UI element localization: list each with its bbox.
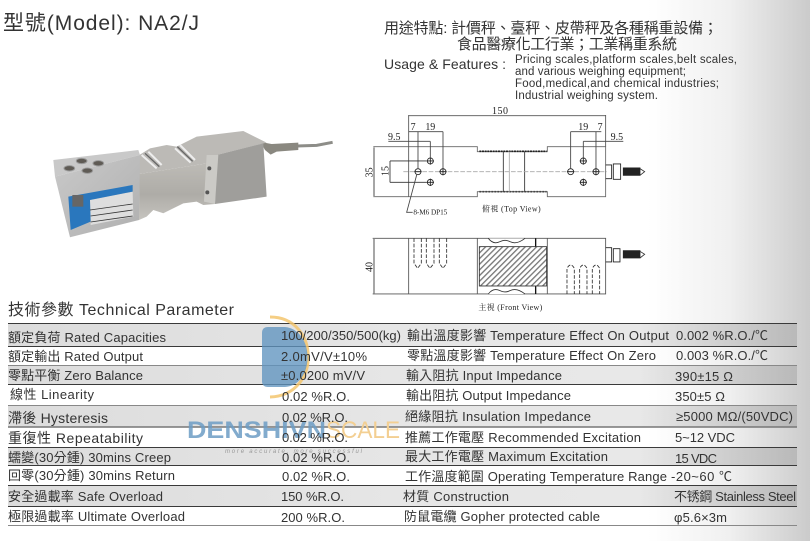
drawing dimensions: 19 <box>578 122 588 133</box>
right column labels: 材質 Construction <box>403 489 509 504</box>
left column labels <box>8 330 185 524</box>
right column values: 0.003 %R.O./℃ <box>676 348 768 363</box>
row shading <box>8 323 797 506</box>
right column values: 390±15 Ω <box>675 369 733 384</box>
table lines <box>8 324 797 526</box>
right column labels: 輸出溫度影響 Temperature Effect On Output <box>407 328 669 343</box>
usage text in English <box>515 54 737 102</box>
product photo: load cell <box>53 131 333 237</box>
drawing dimensions: 9.5 <box>611 132 623 143</box>
left column values: 0.02 %R.O. <box>282 389 350 404</box>
drawing dimensions: 40 <box>364 262 375 272</box>
right column labels: 工作溫度範圍 Operating Temperature Range <box>405 469 667 484</box>
right column values: 15 VDC <box>675 451 717 466</box>
right column values: φ5.6×3m <box>674 510 727 525</box>
cable gland <box>261 142 298 155</box>
watermark logo: DENSHIVN <box>187 417 326 444</box>
drawing dimensions: 俯視 (Top View) <box>482 203 541 213</box>
drawing dimensions: 9.5 <box>388 132 400 143</box>
left column values: ±0.0200 mV/V <box>281 368 365 383</box>
left column labels: 極限過載率 Ultimate Overload <box>8 509 185 524</box>
left column labels: 安全過載率 Safe Overload <box>8 489 163 504</box>
drawing dimensions <box>364 106 623 312</box>
top view <box>373 115 645 212</box>
right column values: -20~60 ℃ <box>671 469 732 484</box>
mounting holes <box>64 158 104 173</box>
label lines <box>90 204 133 222</box>
right column labels: 最大工作電壓 Maximum Excitation <box>405 449 608 464</box>
left column values <box>281 328 401 525</box>
watermark logo: more accurate, more successful <box>225 449 363 455</box>
left column values: 150 %R.O. <box>281 489 344 504</box>
drawing dimensions: 7 <box>411 122 416 133</box>
title: 型號(Model): NA2/J <box>3 12 199 35</box>
right column labels: 輸出阻抗 Output Impedance <box>406 388 571 403</box>
left column values: 0.02 %R.O. <box>282 430 348 445</box>
right column labels: 輸入阻抗 Input Impedance <box>406 368 562 383</box>
right column labels: 絕緣阻抗 Insulation Impedance <box>405 409 591 424</box>
usage text in Chinese <box>384 19 718 53</box>
left column labels: 重復性 Repeatability <box>8 430 143 446</box>
panel: usage and features <box>384 19 737 102</box>
usage text in Chinese: 食品醫療化工行業；工業稱重系統 <box>457 36 677 53</box>
left column values: 0.02 %R.O. <box>282 450 350 465</box>
left block front <box>55 155 140 237</box>
right column values <box>671 328 796 525</box>
right column values: 350±5 Ω <box>675 389 725 404</box>
left column values: 0.02 %R.O. <box>282 469 350 484</box>
beam side <box>139 163 217 220</box>
parameter table <box>8 317 797 526</box>
product label white <box>90 192 133 225</box>
left column labels: 蠕變(30分鍾) 30mins Creep <box>8 450 171 465</box>
right column labels: 防鼠電纜 Gopher protected cable <box>404 509 600 524</box>
left column labels: 零點平衡 Zero Balance <box>8 368 143 383</box>
left column values: 100/200/350/500(kg) <box>281 328 401 343</box>
right column labels <box>403 328 669 524</box>
left column values: 200 %R.O. <box>281 510 345 525</box>
drawing dimensions: 150 <box>492 106 508 117</box>
drawing dimensions: 35 <box>364 167 375 177</box>
left column labels: 回零(30分鍾) 30mins Return <box>8 468 175 483</box>
mid beam top <box>139 131 267 174</box>
usage text in English: Industrial weighing system. <box>515 90 658 102</box>
usage text in English: Pricing scales,platform scales,belt scales, <box>515 54 737 66</box>
left column labels: 額定負荷 Rated Capacities <box>8 330 166 345</box>
right column values: 不锈鋼 Stainless Steel <box>674 489 796 504</box>
right column values: 0.002 %R.O./℃ <box>676 328 768 343</box>
product label blue band <box>68 185 133 230</box>
usage text in English: and various weighing equipment; <box>515 66 686 78</box>
drawing dimensions: 8-M6 DP15 <box>413 208 448 217</box>
left column labels: 線性 Linearity <box>10 387 94 402</box>
left block top <box>53 150 140 177</box>
left column values: 2.0mV/V±10% <box>281 349 367 364</box>
section heading: 技術參數 Technical Parameter <box>8 301 235 319</box>
bracket plate <box>204 155 218 204</box>
usage label: Usage & Features : <box>384 56 506 72</box>
QR code <box>72 195 83 207</box>
technical drawing <box>364 106 645 312</box>
bracket screws <box>205 166 211 194</box>
drawing dimensions: 7 <box>598 122 603 133</box>
right block side <box>215 143 267 204</box>
drawing dimensions: 15 <box>381 166 392 176</box>
watermark logo <box>187 317 400 455</box>
left column labels: 滯後 Hysteresis <box>8 410 108 426</box>
drawing dimensions: 19 <box>425 122 435 133</box>
left column values: 0.02 %R.O. <box>282 410 348 425</box>
watermark logo: SCALE <box>326 417 400 444</box>
front view <box>373 238 645 294</box>
left column labels: 額定輸出 Rated Output <box>8 349 143 364</box>
right column values: 5~12 VDC <box>675 430 735 445</box>
usage text in English: Food,medical,and chemical industries; <box>515 78 719 90</box>
cable <box>297 142 333 146</box>
usage text in Chinese: 用途特點: 計價秤、臺秤、皮帶秤及各種稱重設備； <box>384 19 718 37</box>
right column labels: 推薦工作電壓 Recommended Excitation <box>405 430 641 445</box>
drawing dimensions: 主視 (Front View) <box>478 302 543 312</box>
right column values: ≥5000 MΩ/(50VDC) <box>676 409 793 424</box>
right column labels: 零點溫度影響 Temperature Effect On Zero <box>407 348 656 363</box>
groove highlights <box>142 145 195 168</box>
